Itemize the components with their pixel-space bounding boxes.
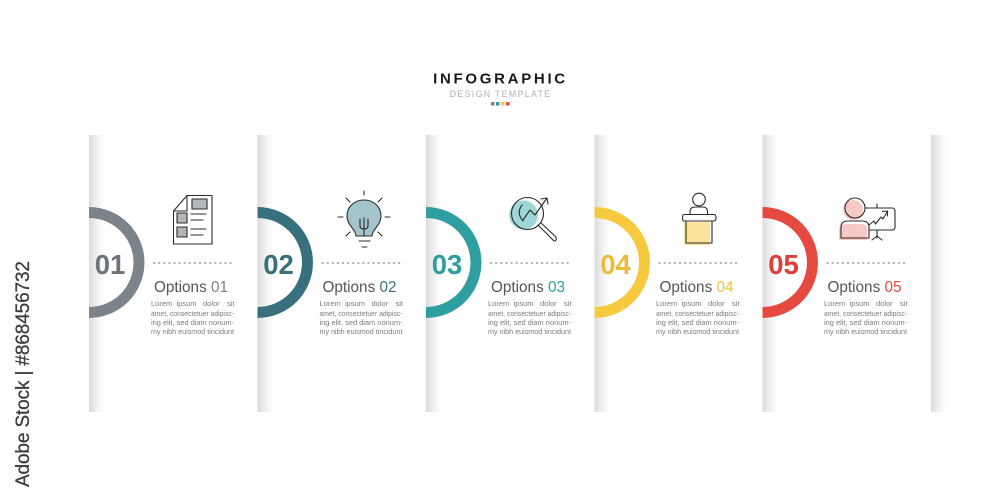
icon: light bulb <box>338 191 390 247</box>
text block: Lorem <box>656 299 677 308</box>
subtitle: DESIGN TEMPLATE <box>450 89 551 99</box>
panel: option 03 <box>426 135 572 412</box>
text block: ing elit, sed diam nonum- <box>320 318 403 327</box>
divider <box>826 262 906 264</box>
ring 02 <box>258 207 313 318</box>
ring 05 <box>762 207 818 318</box>
text block: sit <box>732 299 740 308</box>
text block: amet, consectetuer adipisc- <box>151 309 234 318</box>
text block: my nibh euismod tincidunt <box>320 327 403 336</box>
ring 04 <box>594 207 650 318</box>
text block: Lorem <box>824 299 845 308</box>
divider <box>658 262 738 264</box>
text block: amet, consectetuer adipisc- <box>824 309 907 318</box>
text block: ipsum <box>682 299 702 308</box>
heading: Options 05 <box>828 279 901 296</box>
stock watermark id: Adobe Stock | #868456732 <box>13 261 34 487</box>
text block: my nibh euismod tincidunt <box>488 327 572 336</box>
ring 01 <box>89 207 144 318</box>
text block: my nibh euismod tincidunt <box>824 327 908 336</box>
divider <box>322 262 400 264</box>
icon: speaker at podium <box>682 193 716 245</box>
text block: Lorem <box>488 299 509 308</box>
closing edge shadow <box>931 135 947 412</box>
divider <box>490 262 569 264</box>
text block: sit <box>227 299 235 308</box>
text block: my nibh euismod tincidunt <box>151 327 235 336</box>
icon: document <box>174 196 212 244</box>
icon: presenter with chart <box>839 198 895 240</box>
text block: ing elit, sed diam nonum- <box>656 318 739 327</box>
text block: amet, consectetuer adipisc- <box>320 309 403 318</box>
text block: amet, consectetuer adipisc- <box>656 309 739 318</box>
panel: option 04 <box>594 135 740 412</box>
divider <box>153 262 232 264</box>
text block: ipsum <box>850 299 870 308</box>
text block: sit <box>396 299 404 308</box>
text block: ipsum <box>514 299 534 308</box>
title colour dots <box>491 102 510 106</box>
text block: ing elit, sed diam nonum- <box>151 318 234 327</box>
number 03: 03 <box>432 249 462 280</box>
text block: sit <box>900 299 908 308</box>
text block: dolor <box>203 299 220 308</box>
number 04: 04 <box>600 249 631 280</box>
icon: magnifier with trend <box>509 198 556 241</box>
text block: dolor <box>372 299 389 308</box>
number 05: 05 <box>768 249 799 280</box>
text block: dolor <box>540 299 557 308</box>
text block: sit <box>564 299 572 308</box>
text block: dolor <box>876 299 893 308</box>
text block: ipsum <box>176 299 197 308</box>
text block: ing elit, sed diam nonum- <box>824 318 907 327</box>
title <box>433 70 568 106</box>
number 02: 02 <box>263 249 294 280</box>
number 01: 01 <box>95 249 125 280</box>
text block: Lorem <box>320 299 341 308</box>
text block: my nibh euismod tincidunt <box>656 327 740 336</box>
panel: option 01 <box>89 135 235 412</box>
heading: Options 01 <box>154 279 228 296</box>
text block: ing elit, sed diam nonum- <box>488 318 571 327</box>
title: INFOGRAPHIC <box>433 70 568 88</box>
ring 03 <box>426 207 481 318</box>
heading: Options 03 <box>491 279 565 296</box>
text block: dolor <box>708 299 725 308</box>
text block: ipsum <box>345 299 365 308</box>
text block: amet, consectetuer adipisc- <box>488 309 571 318</box>
text block: Lorem <box>151 299 172 308</box>
heading: Options 02 <box>322 279 396 296</box>
panel: option 05 <box>762 135 908 412</box>
heading: Options 04 <box>660 279 734 296</box>
panel: option 02 <box>258 135 404 412</box>
